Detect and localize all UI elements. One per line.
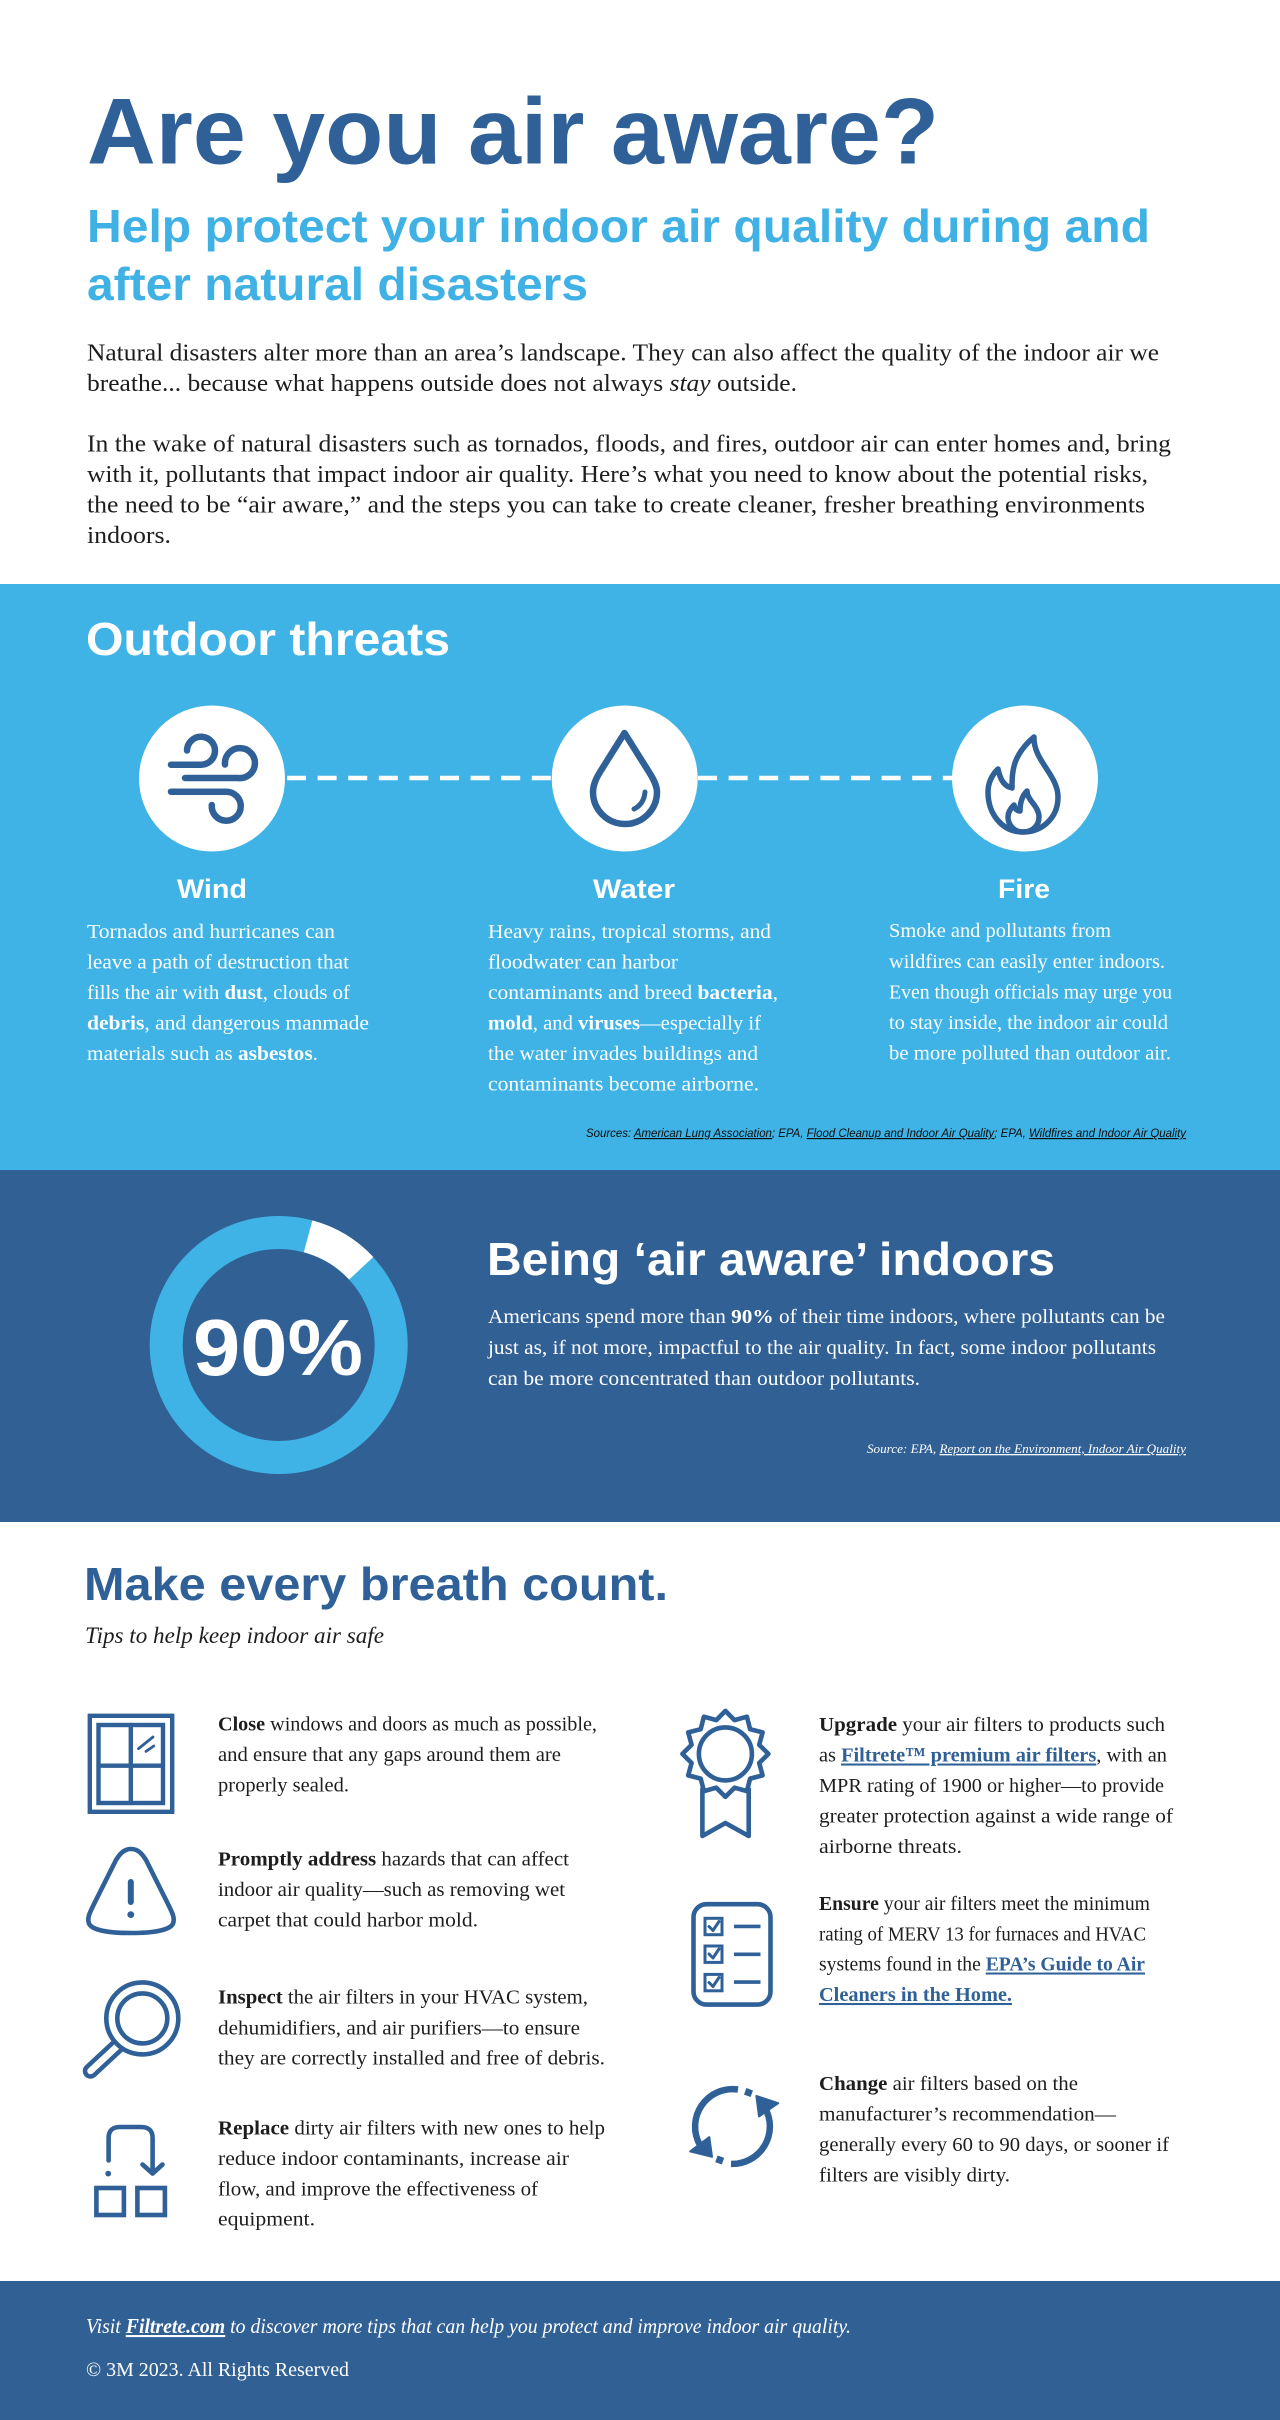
tip: change: generally every 60 to 90 days, or sooner if xyxy=(819,2134,1169,2156)
tip: ensure xyxy=(819,1893,1150,2006)
tip: replace: equipment. xyxy=(218,2208,315,2230)
tip: promptly address xyxy=(218,1848,569,1932)
icon: replace filter xyxy=(96,2127,165,2215)
intro text: with it, pollutants that impact indoor air quality. Here’s what you need to know about the potential risks, xyxy=(87,462,1148,488)
text: wind xyxy=(87,921,369,1065)
icon: wind xyxy=(139,706,285,852)
tip: replace: Replace dirty air filters with new ones to help xyxy=(218,2118,605,2140)
text: fire: Even though officials may urge you xyxy=(889,982,1172,1004)
tip: change: Change air filters based on the xyxy=(819,2073,1078,2095)
text: fire: wildfires can easily enter indoors. xyxy=(889,951,1165,973)
tip: close: and ensure that any gaps around them are xyxy=(218,1744,561,1766)
tip: upgrade: airborne threats. xyxy=(819,1836,962,1858)
tip: promptly address: carpet that could harbor mold. xyxy=(218,1910,478,1932)
heading: make every breath count: Make every breath count. xyxy=(84,1558,668,1610)
text: wind: leave a path of destruction that xyxy=(87,952,349,974)
tip: promptly address: indoor air quality—such as removing wet xyxy=(218,1879,565,1901)
subtitle xyxy=(87,200,1150,310)
label: fire: Fire xyxy=(998,874,1050,904)
tip: close: properly sealed. xyxy=(218,1774,349,1796)
tip: inspect: they are correctly installed and free of debris. xyxy=(218,2048,605,2070)
tip: change: filters are visibly dirty. xyxy=(819,2164,1010,2186)
text: indoors: can be more concentrated than outdoor pollutants. xyxy=(488,1368,920,1390)
text: wind: Tornados and hurricanes can xyxy=(87,921,335,943)
tip: ensure: Cleaners in the Home. xyxy=(819,1984,1012,2006)
tip: close xyxy=(218,1714,597,1796)
heading: outdoor threats: Outdoor threats xyxy=(86,613,450,665)
donut chart: 90%: 90% xyxy=(193,1303,363,1392)
dashed connector: wind to water xyxy=(287,776,552,780)
text: indoors: just as, if not more, impactful to the air quality. In fact, some indoor pollutants xyxy=(487,1337,1156,1359)
tip: ensure: systems found in the EPA’s Guide to Air xyxy=(819,1954,1145,1976)
text: water: mold, and viruses—especially if xyxy=(488,1012,761,1034)
text: water: floodwater can harbor xyxy=(488,952,678,974)
intro text: breathe... because what happens outside does not always stay outside. xyxy=(87,371,797,397)
source: Source: EPA, Report on the Environment, Indoor Air Quality xyxy=(867,1441,1186,1456)
tip: replace: flow, and improve the effectiveness of xyxy=(218,2178,538,2200)
text: fire: Smoke and pollutants from xyxy=(889,920,1111,942)
icon: window xyxy=(90,1716,172,1812)
text: water: the water invades buildings and xyxy=(488,1043,758,1065)
dashed connector: water to fire xyxy=(698,776,953,780)
tip: replace: reduce indoor contaminants, increase air xyxy=(218,2148,569,2170)
subtitle: after natural disasters xyxy=(87,258,588,310)
donut chart: 90% xyxy=(166,1220,391,1458)
copyright: © 3M 2023. All Rights Reserved xyxy=(86,2359,349,2381)
label: water: Water xyxy=(593,874,676,904)
tip: change: manufacturer’s recommendation— xyxy=(819,2104,1117,2126)
tip: inspect xyxy=(218,1986,605,2070)
tip: upgrade xyxy=(819,1714,1173,1858)
heading: being air aware: Being ‘air aware’ indoors xyxy=(487,1233,1055,1285)
text: fire: to stay inside, the indoor air could xyxy=(889,1012,1168,1034)
text: wind: debris, and dangerous manmade xyxy=(87,1012,369,1034)
intro text: indoors. xyxy=(87,523,171,549)
subtitle: Help protect your indoor air quality during and xyxy=(87,200,1150,252)
icon: water drop xyxy=(552,706,698,852)
text: water xyxy=(488,921,778,1096)
icon: award badge xyxy=(682,1711,768,1836)
label: wind: Wind xyxy=(177,874,247,904)
icon: fire xyxy=(952,706,1098,852)
icon: change cycle xyxy=(690,2088,778,2164)
icon: magnifying glass xyxy=(90,1982,178,2071)
text: wind: fills the air with dust, clouds of xyxy=(87,982,350,1004)
tip: upgrade: MPR rating of 1900 or higher—to provide xyxy=(819,1775,1164,1797)
intro text: Natural disasters alter more than an area’s landscape. They can also affect the quality of the indoor air we xyxy=(87,340,1159,366)
text: fire xyxy=(889,920,1172,1064)
call to action: Visit Filtrete.com to discover more tips that can help you protect and improve indoor air quality. xyxy=(86,2314,851,2338)
tip: inspect: Inspect the air filters in your HVAC system, xyxy=(218,1986,588,2008)
sources: Sources: American Lung Association; EPA, Flood Cleanup and Indoor Air Quality; EPA, Wildfires and Indoor Air Quality xyxy=(586,1128,1187,1140)
panel: being air aware indoors xyxy=(0,1170,1280,1522)
text: indoors: Americans spend more than 90% of their time indoors, where pollutants can be xyxy=(488,1306,1165,1328)
tip: upgrade: Upgrade your air filters to products such xyxy=(819,1714,1165,1736)
tip: ensure: rating of MERV 13 for furnaces and HVAC xyxy=(819,1924,1146,1946)
tip: promptly address: Promptly address hazards that can affect xyxy=(218,1848,569,1870)
footer xyxy=(0,2281,1280,2420)
tip: inspect: dehumidifiers, and air purifiers—to ensure xyxy=(218,2018,580,2040)
text: fire: be more polluted than outdoor air. xyxy=(889,1042,1171,1064)
text: water: contaminants and breed bacteria, xyxy=(488,982,778,1004)
text: water: Heavy rains, tropical storms, and xyxy=(488,921,771,943)
text: indoors xyxy=(487,1306,1165,1390)
panel: outdoor threats xyxy=(0,584,1280,1170)
title: Are you air aware? xyxy=(87,78,939,184)
icon: warning xyxy=(88,1849,174,1933)
intro text: In the wake of natural disasters such as tornados, floods, and fires, outdoor air can enter homes and, bring xyxy=(87,432,1171,458)
intro text: the need to be “air aware,” and the steps you can take to create cleaner, fresher breathing environments xyxy=(87,492,1145,518)
tip: change xyxy=(819,2073,1169,2186)
intro text xyxy=(87,340,1171,549)
text: wind: materials such as asbestos. xyxy=(87,1043,318,1065)
icon: checklist xyxy=(694,1904,770,2005)
tip: upgrade: greater protection against a wide range of xyxy=(819,1806,1173,1828)
tip: replace xyxy=(218,2118,605,2230)
text: water: contaminants become airborne. xyxy=(488,1074,759,1096)
tip: close: Close windows and doors as much as possible, xyxy=(218,1714,597,1736)
subheading: tips: Tips to help keep indoor air safe xyxy=(85,1623,384,1648)
tip: ensure: Ensure your air filters meet the minimum xyxy=(819,1893,1150,1915)
tip: upgrade: as Filtrete™ premium air filters, with an xyxy=(819,1744,1167,1766)
